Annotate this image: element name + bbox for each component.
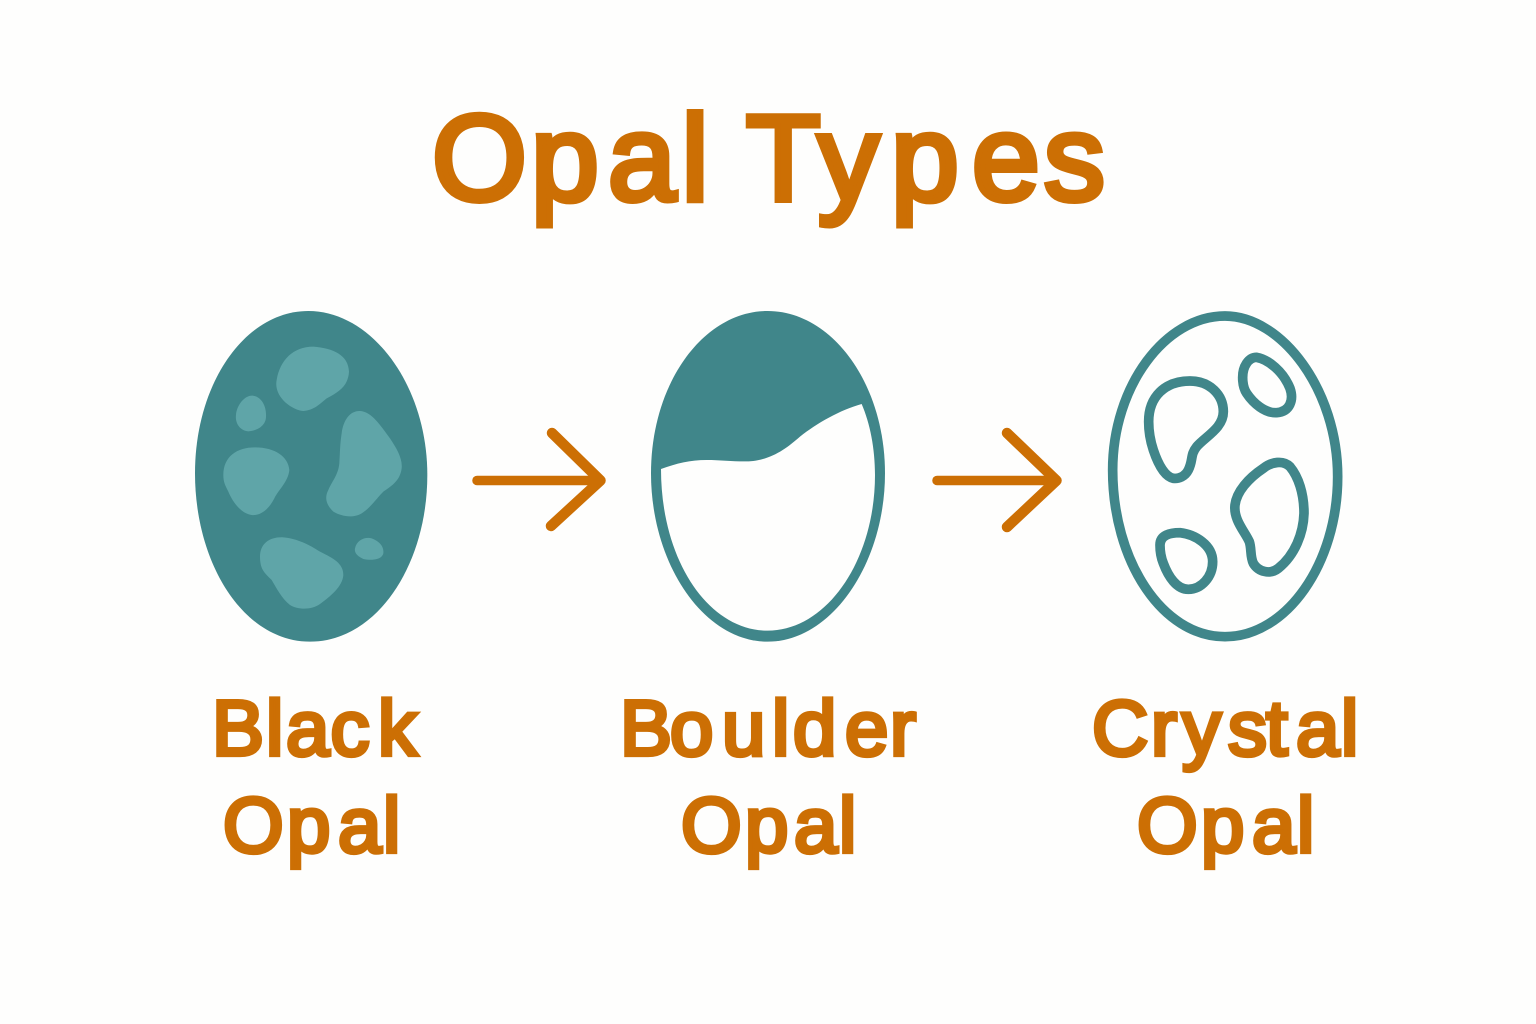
label: crystal opal: Crystal bbox=[1092, 684, 1358, 772]
opal flecks bbox=[223, 347, 402, 609]
outlined flecks bbox=[1149, 357, 1304, 589]
label: black opal: Opal bbox=[223, 781, 400, 869]
icon: black opal bbox=[195, 311, 427, 642]
label: boulder opal: Boulder bbox=[620, 684, 916, 772]
opal body bbox=[195, 311, 427, 642]
label: black opal: Black bbox=[212, 684, 418, 772]
icon: boulder opal bbox=[651, 311, 885, 642]
title: Opal Types bbox=[432, 90, 1105, 226]
icon: crystal opal bbox=[1113, 316, 1338, 637]
label: crystal opal bbox=[1092, 684, 1358, 869]
label: crystal opal: Opal bbox=[1137, 781, 1314, 869]
label: black opal bbox=[212, 684, 418, 869]
arrow 2 bbox=[937, 433, 1056, 527]
arrow 1 bbox=[477, 433, 600, 526]
white lower body bbox=[661, 404, 875, 631]
opal outline bbox=[1113, 316, 1338, 637]
label: boulder opal: Opal bbox=[681, 781, 856, 869]
label: boulder opal bbox=[620, 684, 916, 869]
opal outline and dark cap bbox=[651, 311, 885, 642]
